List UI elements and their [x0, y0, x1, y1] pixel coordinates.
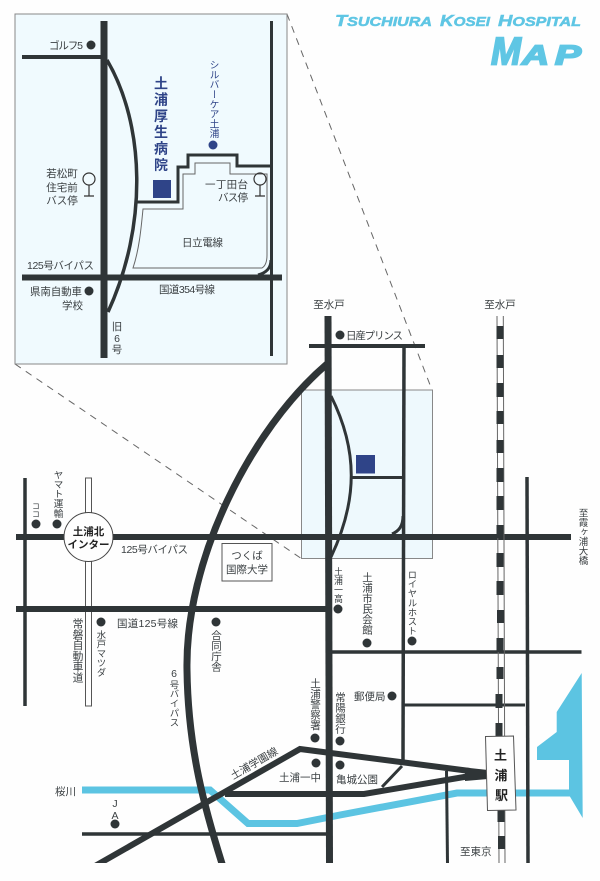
map labels: 土浦一高: [333, 566, 343, 604]
interchange: Tsuchiura-kita: インター: [68, 539, 110, 551]
inset landmark: golf 5: [49, 39, 96, 52]
inset labels: 号: [112, 344, 122, 356]
interchange: Tsuchiura-kita: 土浦北: [73, 525, 105, 538]
title: KOSEI: [440, 13, 491, 30]
inset bus stop: Wakamatsucho: 住宅前: [46, 181, 78, 194]
map labels: ヤマト運輸: [52, 470, 63, 519]
inset bus stop: Itchodadai: バス停: [218, 191, 248, 204]
title: A: [521, 40, 549, 70]
inset labels: 学校: [62, 299, 83, 312]
map labels: 土浦警察署: [309, 677, 321, 730]
inset bus stop: Wakamatsucho: [46, 167, 95, 207]
inset labels: 旧: [112, 321, 122, 333]
inset labels: 国道354号線: [159, 283, 216, 296]
label box: Tsukuba Kokusai University: 国際大学: [226, 563, 268, 576]
map labels: 常磐自動車道: [71, 618, 83, 683]
map labels: 至水戸: [313, 299, 345, 311]
map labels: 日産プリンス: [346, 329, 403, 342]
map labels: 号バイパス: [168, 680, 180, 727]
map labels: 125号バイパス: [121, 544, 188, 556]
label box: Tsukuba Kokusai University: [222, 544, 272, 581]
panel: hospital area highlight on main map: [302, 390, 432, 558]
map labels: ココ: [32, 502, 40, 518]
map labels: [32, 299, 588, 858]
title: H OSPITAL: [498, 13, 581, 30]
inset bus stop: Wakamatsucho: バス停: [46, 194, 78, 207]
station: Tsuchiura: 浦: [494, 768, 508, 783]
map labels: 土浦一中: [279, 771, 321, 784]
station: Tsuchiura: [486, 736, 516, 810]
inset landmark: golf 5: ゴルフ5: [49, 39, 83, 52]
map labels: 土浦学園線: [228, 744, 281, 782]
map labels: ロイヤルホスト: [406, 570, 418, 636]
map labels: 合同庁舎: [210, 629, 222, 673]
inset bus stop: Itchodadai: [205, 173, 266, 204]
map labels: J: [112, 798, 118, 810]
map labels: A: [111, 810, 119, 822]
title: TSUCHIURA: [335, 13, 432, 30]
title: [335, 13, 581, 74]
station: Tsuchiura: 土: [494, 748, 507, 763]
river: Sakuragawa: [82, 673, 583, 824]
map labels: 至霞ヶ浦大橋: [576, 508, 588, 566]
inset labels: 日立電線: [182, 236, 224, 249]
inset bus stop: Itchodadai: 一丁田台: [205, 178, 248, 191]
map labels: 土浦市民会館: [361, 571, 373, 636]
inset labels: 125号バイパス: [27, 260, 94, 272]
inset labels: 6: [114, 333, 120, 345]
title: M: [491, 30, 522, 74]
inset landmark: silver care: シルバーケア土浦: [208, 60, 219, 139]
panel: enlarged hospital area map: [15, 14, 287, 364]
map labels: 郵便局: [354, 690, 386, 703]
inset labels: [27, 236, 224, 356]
map labels: 桜川: [55, 785, 76, 798]
map labels: 国道125号線: [117, 617, 178, 630]
road network: [16, 316, 582, 870]
inset hospital name: 土浦厚生病院: [153, 76, 169, 174]
map labels: 至東京: [460, 845, 492, 858]
interchange: Tsuchiura-kita: [64, 512, 113, 562]
map labels: 常陽銀行: [334, 691, 346, 735]
railway: Joban line: [497, 316, 505, 863]
map labels: 水戸マツダ: [96, 629, 106, 677]
station: Tsuchiura: 駅: [495, 788, 508, 803]
inset labels: 県南自動車: [30, 285, 82, 298]
inset hospital marker: [153, 180, 171, 198]
map labels: 亀城公園: [336, 773, 378, 786]
map labels: 6: [171, 668, 177, 680]
inset roads: [22, 21, 282, 358]
map labels: 至水戸: [484, 299, 516, 311]
expressway: Joban: [86, 478, 92, 706]
label box: Tsukuba Kokusai University: つくば: [231, 550, 263, 562]
hospital marker on main map: [356, 455, 375, 474]
zoom guide dashed lines: [15, 14, 432, 559]
inset bus stop: Wakamatsucho: 若松町: [46, 167, 78, 180]
title: P: [555, 40, 581, 70]
